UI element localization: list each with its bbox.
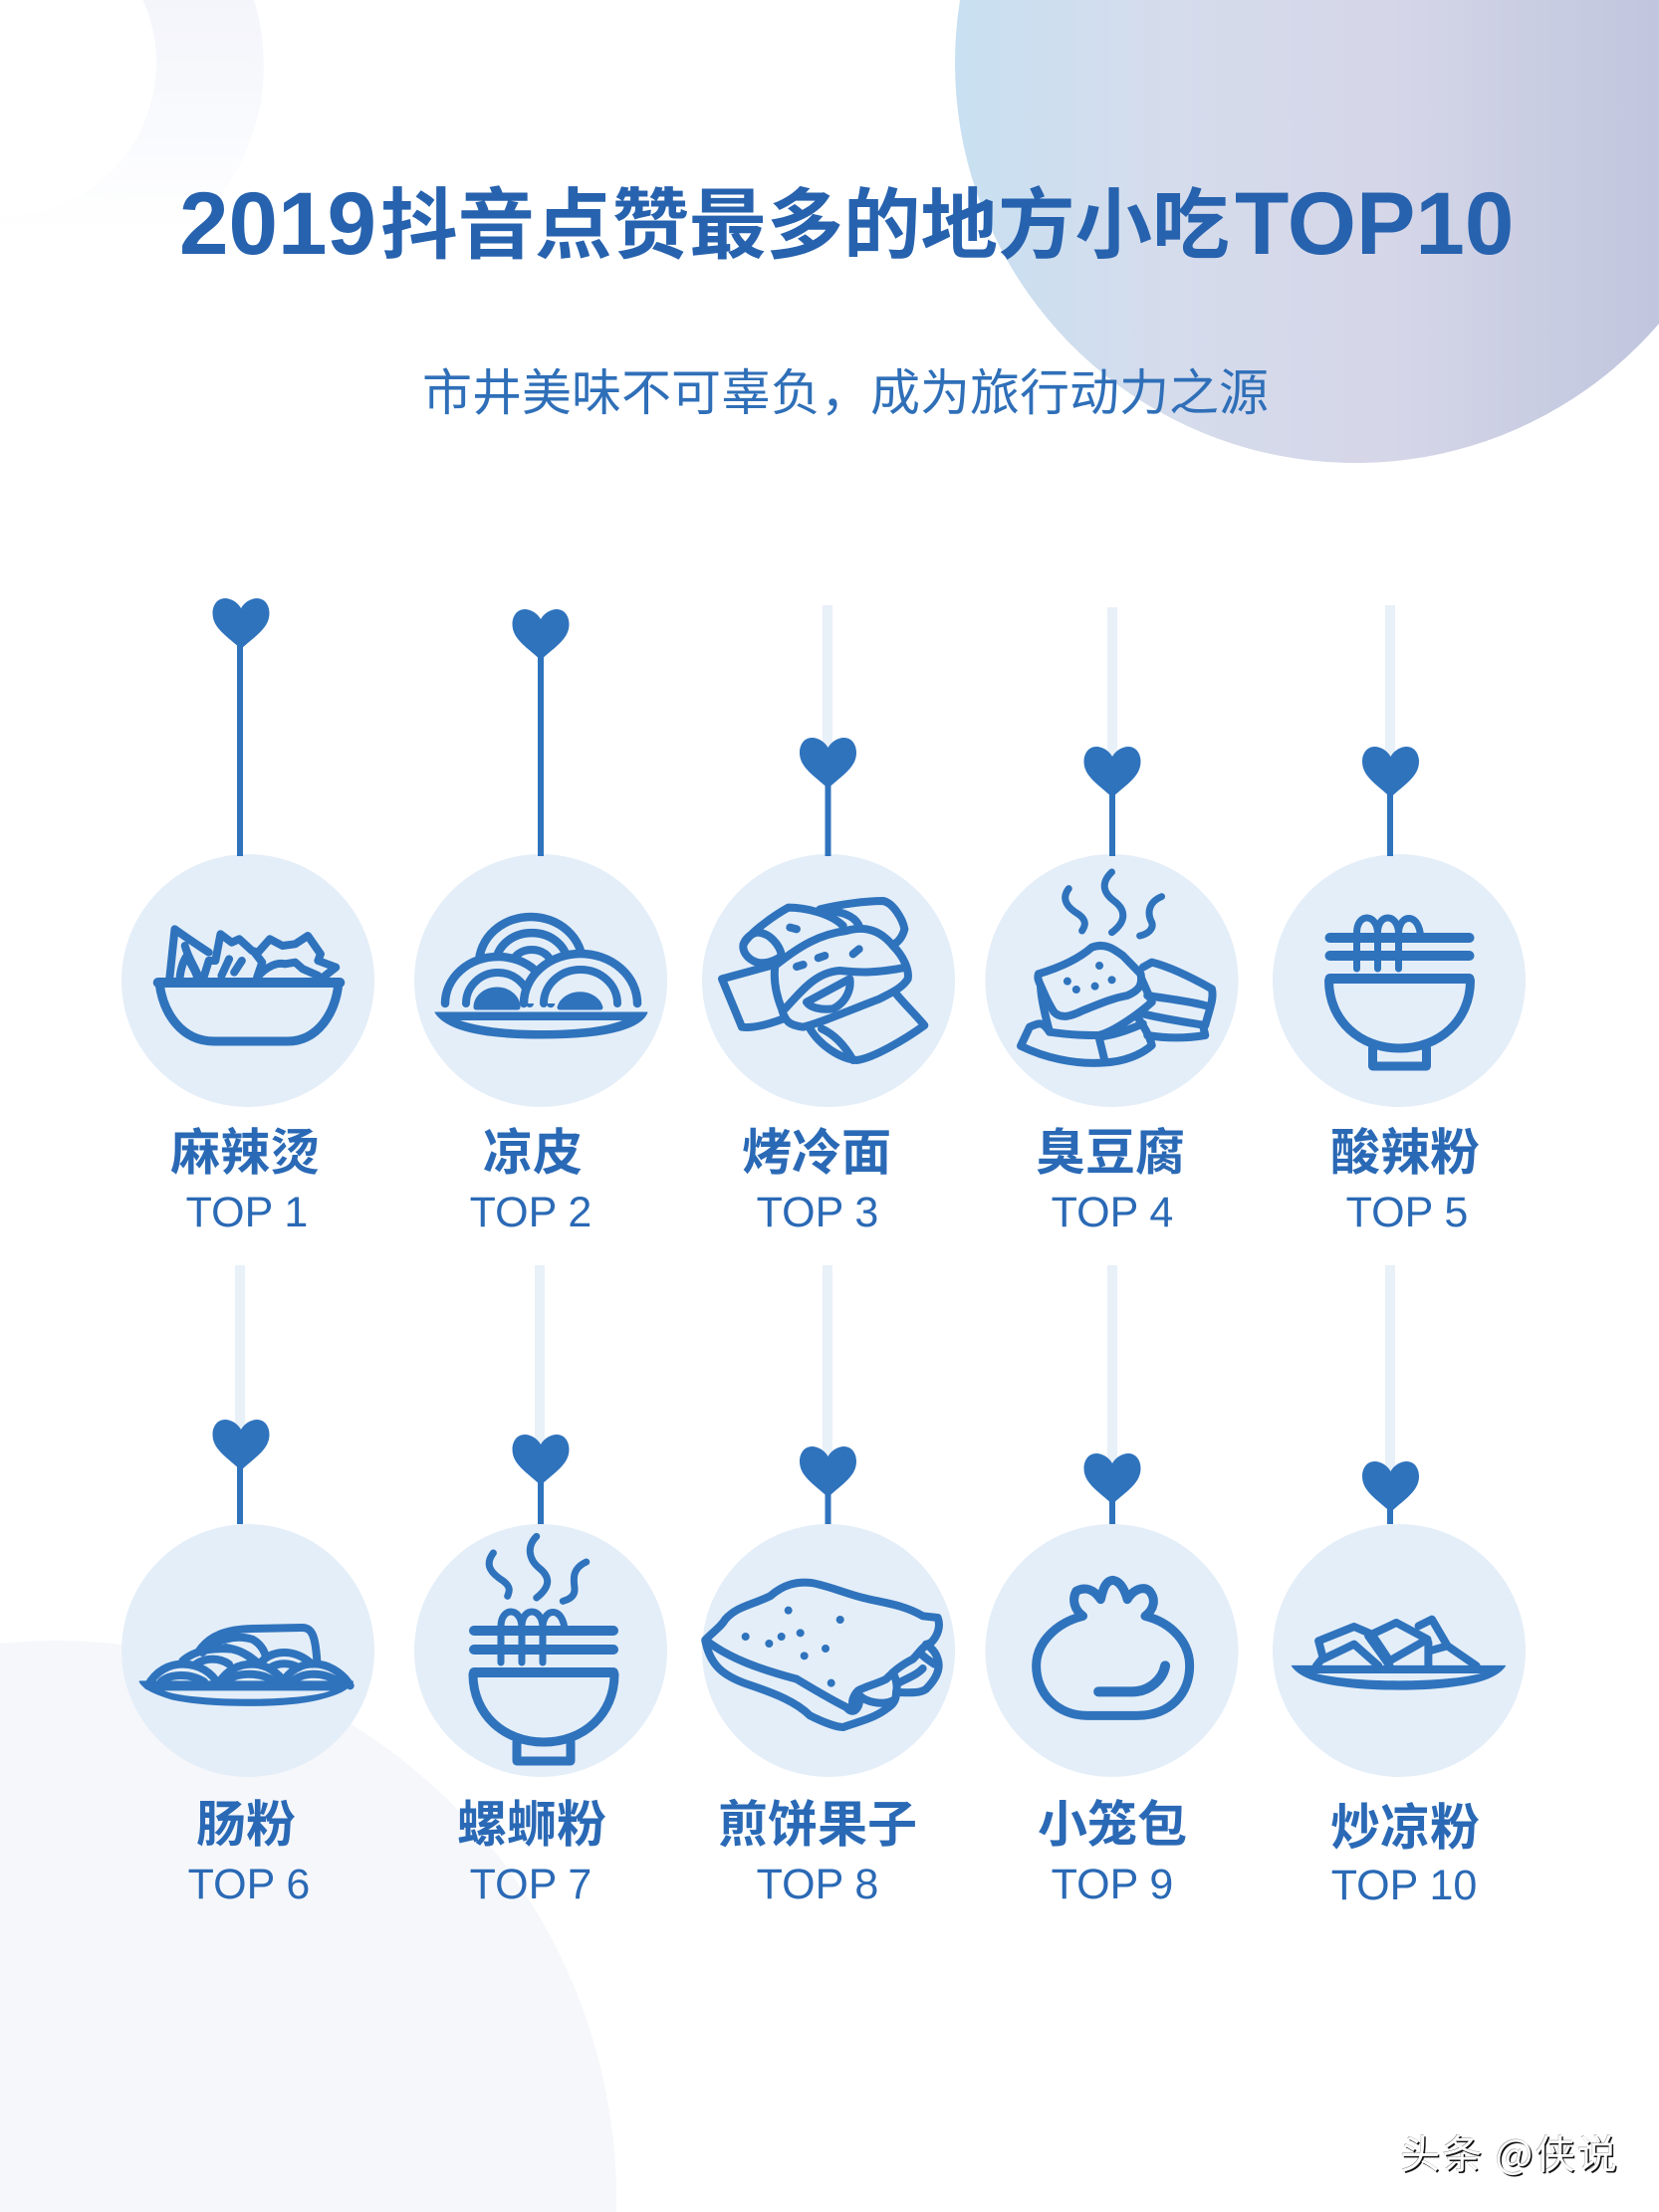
- label 炒凉粉: 炒凉粉: [1330, 1788, 1480, 1860]
- label 凉皮: 凉皮: [483, 1113, 583, 1185]
- background: bottom-left faint circle: [0, 1641, 616, 2212]
- rank TOP 7: TOP 7: [470, 1861, 592, 1908]
- item 1: 麻辣烫: [121, 598, 374, 1236]
- stem and heart 6: [213, 1265, 269, 1524]
- rank TOP 5: TOP 5: [1346, 1189, 1468, 1236]
- label 酸辣粉: 酸辣粉: [1330, 1113, 1480, 1185]
- item 8: 煎饼果子: [702, 1265, 955, 1908]
- item 2: 凉皮: [414, 609, 667, 1236]
- item 7: 螺蛳粉: [414, 1265, 667, 1908]
- stem and heart 5: [1362, 605, 1419, 856]
- label 肠粉: 肠粉: [196, 1785, 296, 1857]
- label 麻辣烫: 麻辣烫: [170, 1113, 320, 1185]
- rank TOP 9: TOP 9: [1052, 1861, 1173, 1908]
- item 9: 小笼包: [986, 1265, 1239, 1908]
- label 螺蛳粉: 螺蛳粉: [457, 1785, 606, 1857]
- stem and heart 9: [1083, 1265, 1141, 1524]
- rank TOP 2: TOP 2: [470, 1189, 592, 1236]
- icon: stir-fried jelly plate: [1292, 1620, 1506, 1689]
- icon: noodle plate: [435, 917, 647, 1038]
- item 3: 烤冷面: [702, 605, 955, 1236]
- label 煎饼果子: 煎饼果子: [718, 1785, 917, 1857]
- label 小笼包: 小笼包: [1038, 1785, 1187, 1857]
- rank TOP 3: TOP 3: [757, 1189, 878, 1236]
- rank TOP 10: TOP 10: [1331, 1862, 1477, 1909]
- stem and heart 4: [1083, 607, 1141, 856]
- icon: salad bowl: [158, 929, 340, 1041]
- stem and heart 10: [1362, 1265, 1419, 1524]
- rank TOP 8: TOP 8: [757, 1861, 878, 1908]
- title: 抖音点赞最多的地方小吃: [380, 163, 1230, 275]
- watermark: 头条 @侠说: [1400, 2122, 1619, 2180]
- stem and heart 2: [512, 609, 570, 856]
- title: TOP10: [1235, 173, 1514, 273]
- rank TOP 1: TOP 1: [186, 1189, 308, 1236]
- icon: jianbing pancake: [705, 1583, 939, 1727]
- item 6: 肠粉: [121, 1265, 374, 1908]
- stem and heart 8: [800, 1265, 856, 1524]
- stem and heart 1: [213, 598, 269, 856]
- background: top-right gradient circle: [955, 0, 1659, 463]
- title: 2019: [179, 173, 376, 273]
- stem and heart 3: [800, 605, 856, 856]
- label 臭豆腐: 臭豆腐: [1036, 1113, 1185, 1185]
- icon: steamed bun: [1037, 1580, 1190, 1715]
- icon: noodle bowl with chopsticks: [1328, 918, 1470, 1066]
- rank TOP 6: TOP 6: [188, 1861, 310, 1908]
- icon: steaming noodle bowl: [473, 1536, 614, 1761]
- icon: stinky tofu with steam: [1021, 872, 1213, 1063]
- stem and heart 7: [512, 1265, 570, 1524]
- icon: rice noodle roll plate: [140, 1628, 353, 1705]
- icon: grilled cold noodle rolls: [722, 901, 924, 1060]
- subtitle: 市井美味不可辜负，成为旅行动力之源: [422, 353, 1269, 425]
- item 5: 酸辣粉: [1273, 605, 1526, 1236]
- background: top-left faint crescent: [0, 0, 264, 286]
- item 4: 臭豆腐: [986, 607, 1239, 1236]
- item 10: 炒凉粉: [1273, 1265, 1526, 1909]
- label 烤冷面: 烤冷面: [742, 1113, 891, 1185]
- rank TOP 4: TOP 4: [1052, 1189, 1173, 1236]
